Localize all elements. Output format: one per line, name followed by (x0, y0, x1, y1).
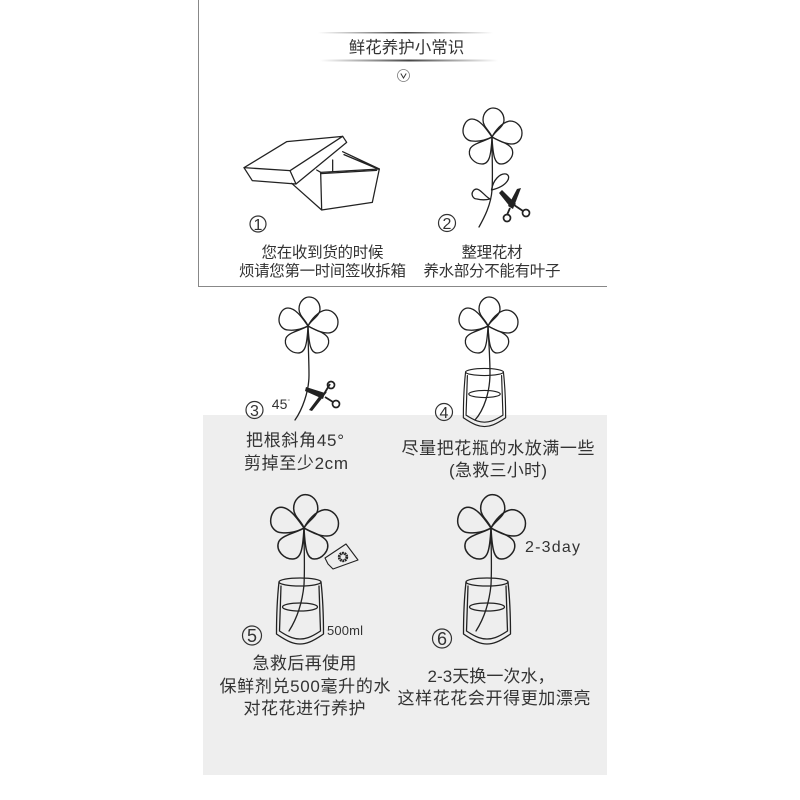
panel: top frame (198, 0, 607, 286)
text: step 6 caption (398, 667, 590, 708)
label: 45 degrees: 45 (272, 396, 287, 412)
text: step 3 caption: 把根斜角45° (246, 431, 344, 450)
icon: flower in vase (459, 297, 518, 427)
number 4 (436, 404, 452, 422)
step 2 (424, 108, 560, 280)
text: step 1 caption (239, 244, 406, 280)
step 4 (402, 297, 594, 480)
step 1 (239, 136, 406, 280)
text: step 4 caption: 尽量把花瓶的水放满一些 (402, 439, 594, 458)
number 6 (432, 629, 452, 649)
number 1 (250, 216, 266, 234)
number 5 (242, 626, 262, 646)
icon: flower in vase (271, 495, 338, 644)
panel: grey background (203, 415, 607, 775)
text: step 1 caption: 烦请您第一时间签收拆箱 (239, 262, 406, 280)
title: 鲜花养护小常识 (349, 38, 464, 57)
text: step 2 caption: 整理花材 (462, 244, 522, 262)
number 4: 4 (440, 405, 449, 422)
icon: down chevron in circle (398, 70, 410, 82)
text: step 5 caption (220, 653, 390, 718)
number 3: 3 (250, 403, 259, 420)
icon: flower in vase (458, 495, 526, 644)
text: step 1 caption: 您在收到货的时候 (262, 244, 384, 262)
step 5 (220, 495, 390, 718)
number 2 (438, 214, 456, 233)
text: step 4 caption: (急救三小时) (449, 461, 547, 480)
number 2: 2 (443, 216, 452, 233)
text: step 5 caption: 保鲜剂兑500毫升的水 (220, 677, 390, 696)
text: step 5 caption: 急救后再使用 (252, 653, 356, 673)
text: step 3 caption (244, 431, 348, 473)
step 6 (398, 495, 590, 708)
text: step 5 caption: 对花花进行养护 (244, 699, 366, 718)
text: step 2 caption (424, 244, 560, 280)
icon: open box (244, 136, 379, 210)
icon: scissors (499, 188, 530, 222)
number 5: 5 (247, 626, 257, 646)
icon: scissors (305, 382, 340, 411)
icon: preservative sachet (325, 544, 358, 569)
number 3 (246, 402, 263, 420)
step 3 (244, 297, 348, 473)
icon: flower with leaves (463, 108, 522, 227)
text: step 3 caption: 剪掉至少2cm (244, 454, 348, 473)
label: 45 degrees: ° (287, 398, 290, 406)
number 1: 1 (254, 217, 263, 234)
label: 2-3day: 2-3day (525, 539, 580, 556)
text: step 6 caption: 这样花花会开得更加漂亮 (398, 689, 590, 708)
number 6: 6 (437, 629, 447, 649)
text: step 4 caption (402, 439, 594, 480)
label: 500ml: 500ml (327, 623, 363, 638)
text: step 6 caption: 2-3天换一次水， (428, 667, 554, 686)
text: step 2 caption: 养水部分不能有叶子 (424, 262, 560, 280)
icon: flower with cut stem (279, 297, 338, 420)
